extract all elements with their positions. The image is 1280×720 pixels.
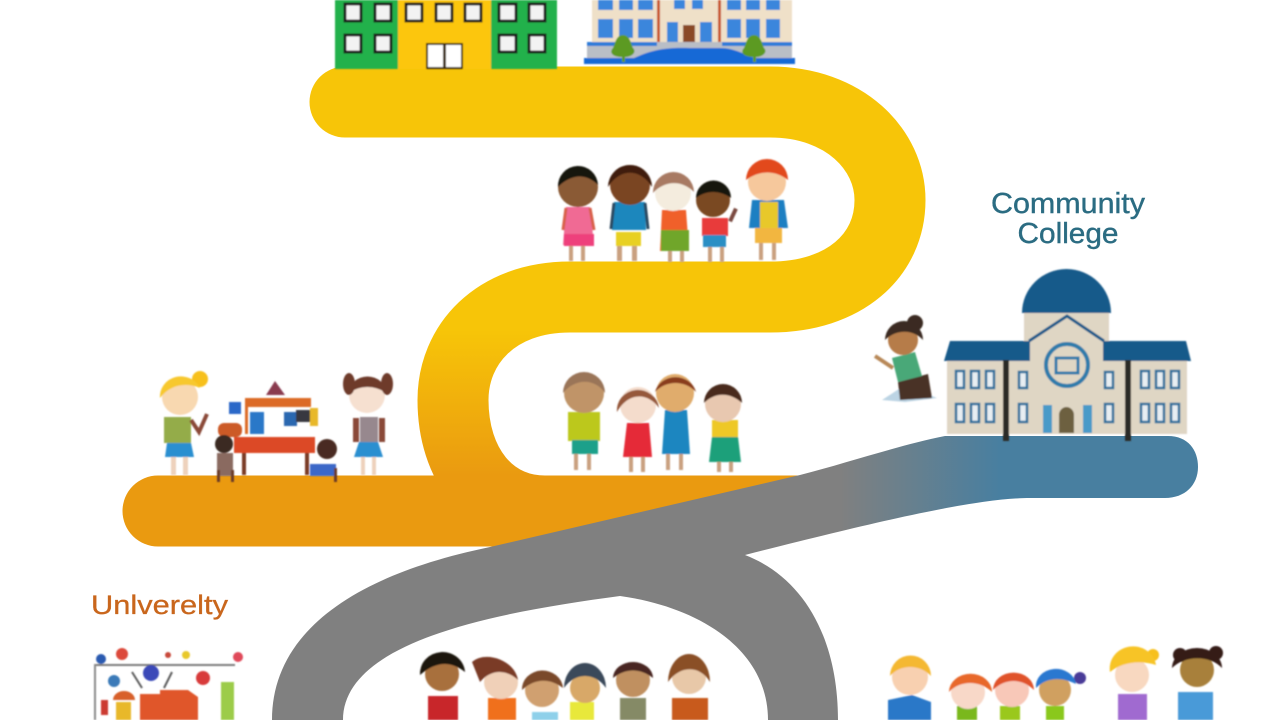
orange path segment [122, 476, 800, 546]
title: Community College: Community [991, 188, 1146, 220]
building: secondary school [584, 0, 795, 64]
children group on yellow path [558, 159, 788, 262]
children and table on orange path left [160, 371, 393, 482]
yellow winding path [345, 102, 890, 511]
children group on grey path [420, 652, 710, 720]
girl with blonde hair [160, 371, 208, 475]
seated child reading [875, 315, 937, 402]
title: Community College: College [1018, 218, 1118, 250]
children group on orange path centre [563, 372, 742, 472]
activity table with toys [218, 381, 318, 475]
building: community college [944, 269, 1191, 441]
icon: university activity wall [94, 648, 243, 720]
grey to blue forked path [272, 436, 1198, 720]
building: primary school [335, 0, 557, 69]
girl with pigtails [343, 373, 393, 475]
label: University: Unlverelty [91, 590, 229, 620]
small child right of table [310, 439, 337, 482]
small child left of table [215, 435, 234, 482]
children group bottom right [888, 646, 1223, 720]
title: Community College [991, 188, 1146, 250]
